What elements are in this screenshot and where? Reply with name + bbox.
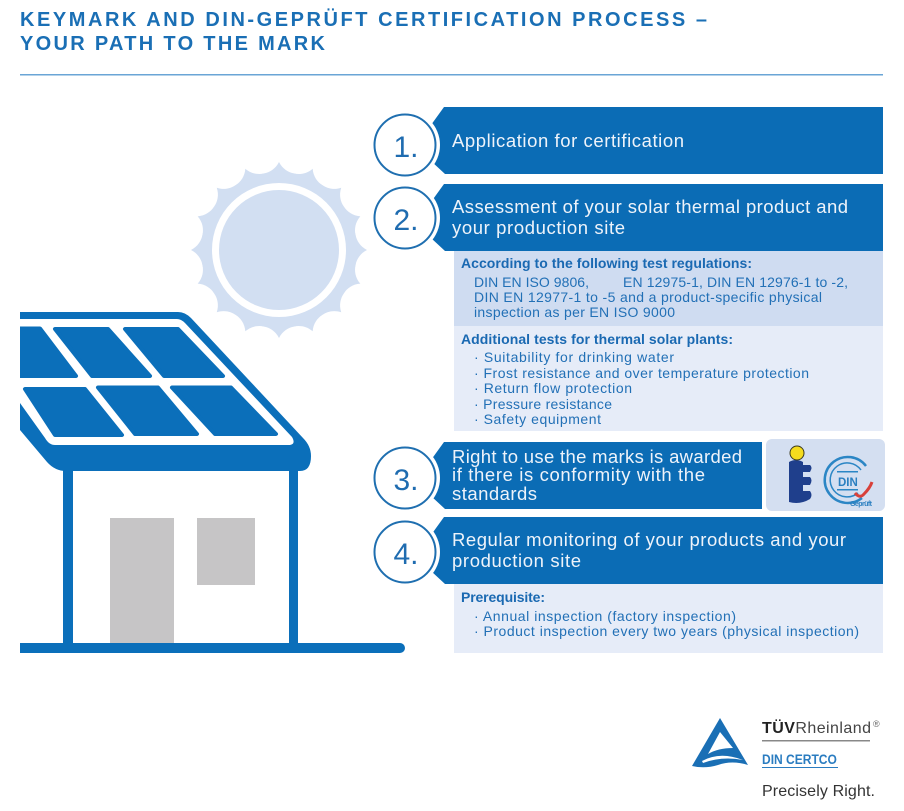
icon: TÜV triangle	[692, 718, 748, 767]
number badge: 1.	[393, 131, 419, 164]
panel: additional tests: Additional tests for thermal solar plants:	[461, 331, 733, 347]
icon: DIN Geprüft logo: DIN	[838, 477, 858, 489]
step 3	[370, 442, 762, 513]
title	[20, 8, 707, 55]
panel: test regulations: DIN EN 12977-1 to -5 and a product-specific physical	[474, 289, 822, 305]
banner text: standards	[452, 483, 537, 504]
banner text: if there is conformity with the	[452, 464, 705, 485]
banner text: Assessment of your solar thermal product and	[452, 196, 848, 217]
solar panels	[18, 328, 276, 435]
banner text: Regular monitoring of your products and your	[452, 529, 846, 550]
title: KEYMARK AND DIN-GEPRÜFT CERTIFICATION PROCESS –	[20, 8, 707, 31]
number badge: 2.	[393, 204, 419, 237]
logo: TÜV Rheinland DIN CERTCO	[692, 718, 880, 800]
panel: test regulations: EN 12975-1, DIN EN 12976-1 to -2,	[623, 274, 848, 290]
tagline: Precisely Right.	[762, 783, 875, 800]
icon: DIN Geprüft logo	[825, 457, 873, 508]
banner text	[452, 446, 742, 504]
banner text: production site	[452, 550, 581, 571]
banner text	[452, 529, 846, 571]
panel: additional tests: · Suitability for drinking water	[474, 349, 674, 365]
banner	[431, 107, 883, 174]
panel: additional tests: · Safety equipment	[474, 411, 601, 427]
title: YOUR PATH TO THE MARK	[20, 33, 326, 55]
icon: DIN Geprüft logo: Geprüft	[850, 501, 873, 508]
panel: test regulations	[454, 251, 883, 326]
panel: prerequisite: · Product inspection every two years (physical inspection)	[474, 623, 859, 639]
window	[197, 518, 255, 585]
step 1	[370, 107, 883, 180]
panel: test regulations: inspection as per EN ISO 9000	[474, 304, 675, 320]
panel: prerequisite: · Annual inspection (factory inspection)	[474, 608, 736, 624]
number badge: 3.	[393, 464, 419, 497]
logo: TÜV Rheinland DIN CERTCO: ®	[873, 719, 880, 729]
banner text: Right to use the marks is awarded	[452, 446, 742, 467]
roof	[20, 312, 311, 471]
panel: test regulations: According to the following test regulations:	[461, 255, 752, 271]
brand name: TÜVRheinland	[762, 718, 871, 737]
panel: certification marks	[766, 439, 885, 511]
banner	[431, 442, 762, 509]
icon: Keymark logo	[789, 446, 812, 503]
house walls	[63, 470, 298, 645]
number badge	[370, 443, 440, 513]
door	[110, 518, 174, 644]
DIN CERTCO: DIN CERTCO	[762, 751, 837, 767]
icon: sun	[191, 162, 367, 338]
banner	[431, 517, 883, 584]
banner	[431, 184, 883, 251]
panel: prerequisite	[454, 584, 883, 653]
panel: additional tests: · Pressure resistance	[474, 396, 612, 412]
step 4	[370, 517, 883, 587]
step 2	[370, 183, 883, 253]
panel: additional tests: · Frost resistance and over temperature protection	[474, 365, 809, 381]
number badge: 4.	[393, 538, 419, 571]
icon: house with solar roof	[0, 305, 405, 653]
panel: prerequisite: Prerequisite:	[461, 589, 545, 605]
panel: additional tests: · Return flow protection	[474, 380, 632, 396]
roof surface	[20, 319, 294, 445]
panel: additional tests	[454, 326, 883, 431]
number badge	[370, 110, 440, 180]
banner text: Application for certification	[452, 130, 684, 151]
banner text: your production site	[452, 217, 625, 238]
panel: test regulations: DIN EN ISO 9806,	[474, 274, 589, 290]
number badge	[370, 183, 440, 253]
banner text	[452, 196, 848, 238]
ground line	[20, 643, 405, 653]
number badge	[370, 517, 440, 587]
